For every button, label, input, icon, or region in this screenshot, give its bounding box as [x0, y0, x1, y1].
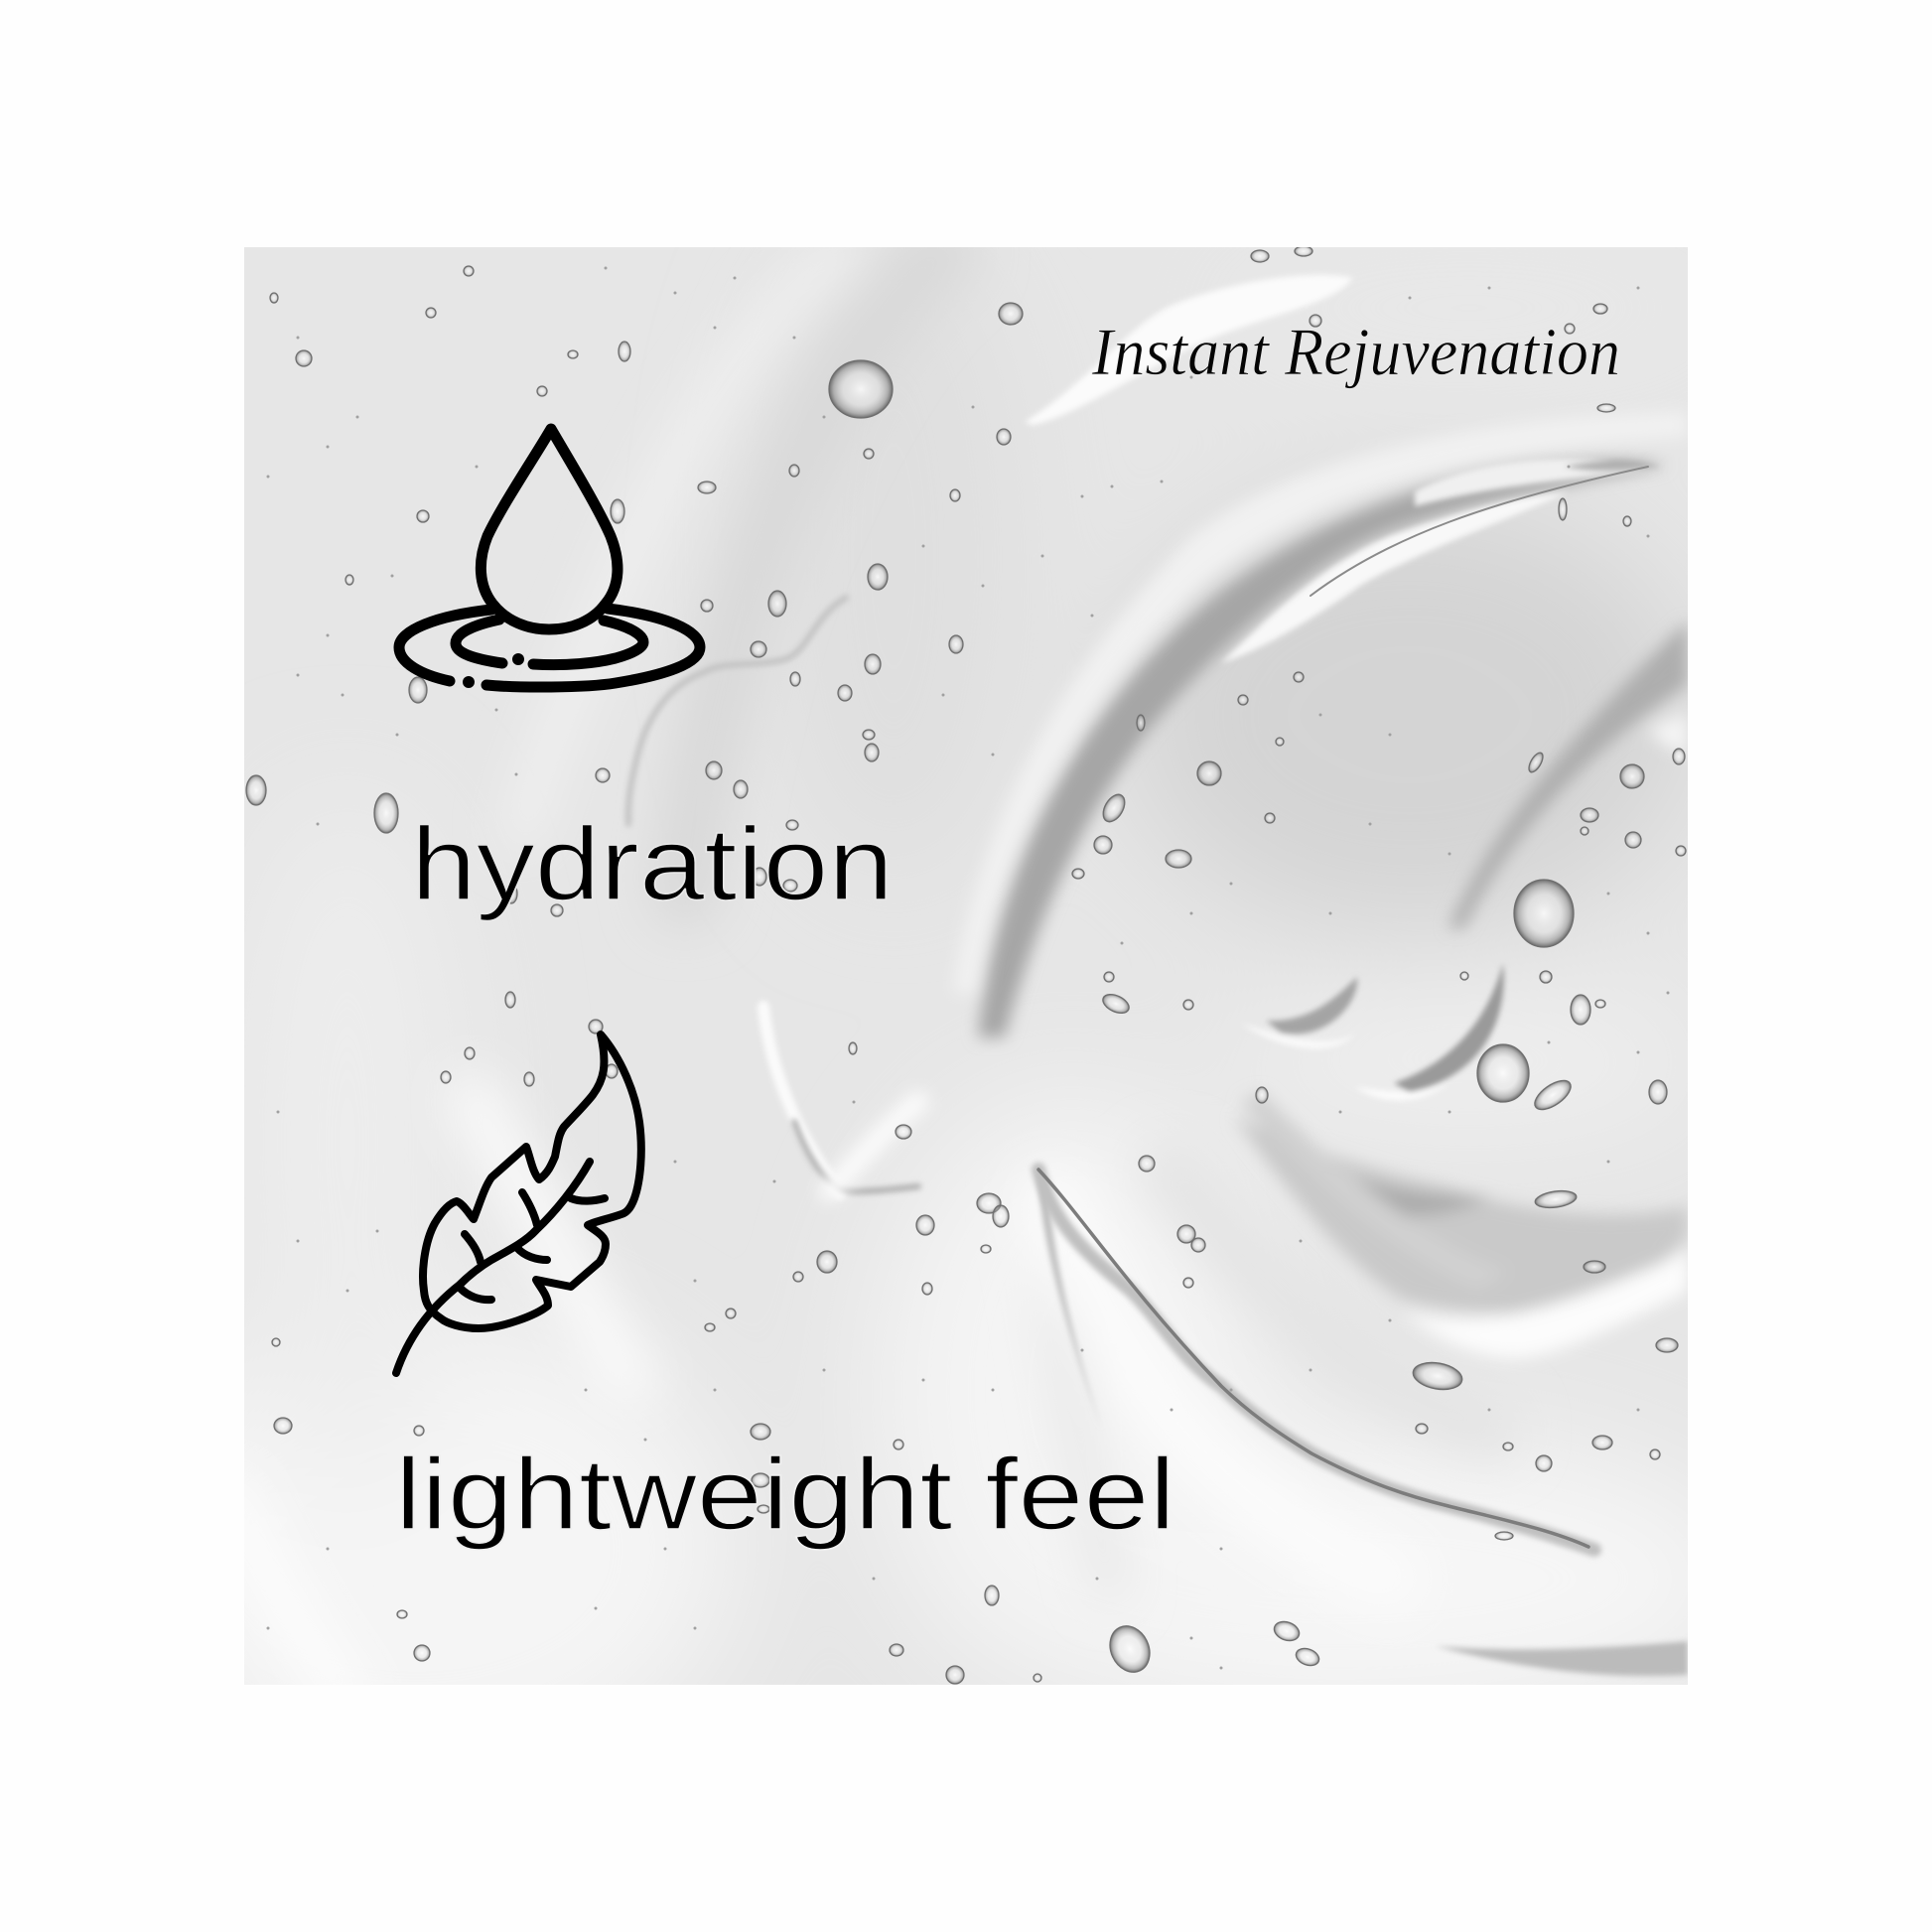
infographic canvas: [244, 247, 1688, 1685]
icon: feather leaf: [396, 1035, 641, 1373]
label: hydration: hydration: [411, 807, 894, 922]
label: lightweight feel: lightweight feel: [395, 1438, 1175, 1551]
gel bubbles: [246, 246, 1686, 1684]
title: Instant Rejuvenation: Instant Rejuvenation: [1091, 314, 1620, 389]
panel: clear gel texture photo: [244, 247, 1688, 1685]
icon: water drop with ripples: [399, 429, 700, 688]
